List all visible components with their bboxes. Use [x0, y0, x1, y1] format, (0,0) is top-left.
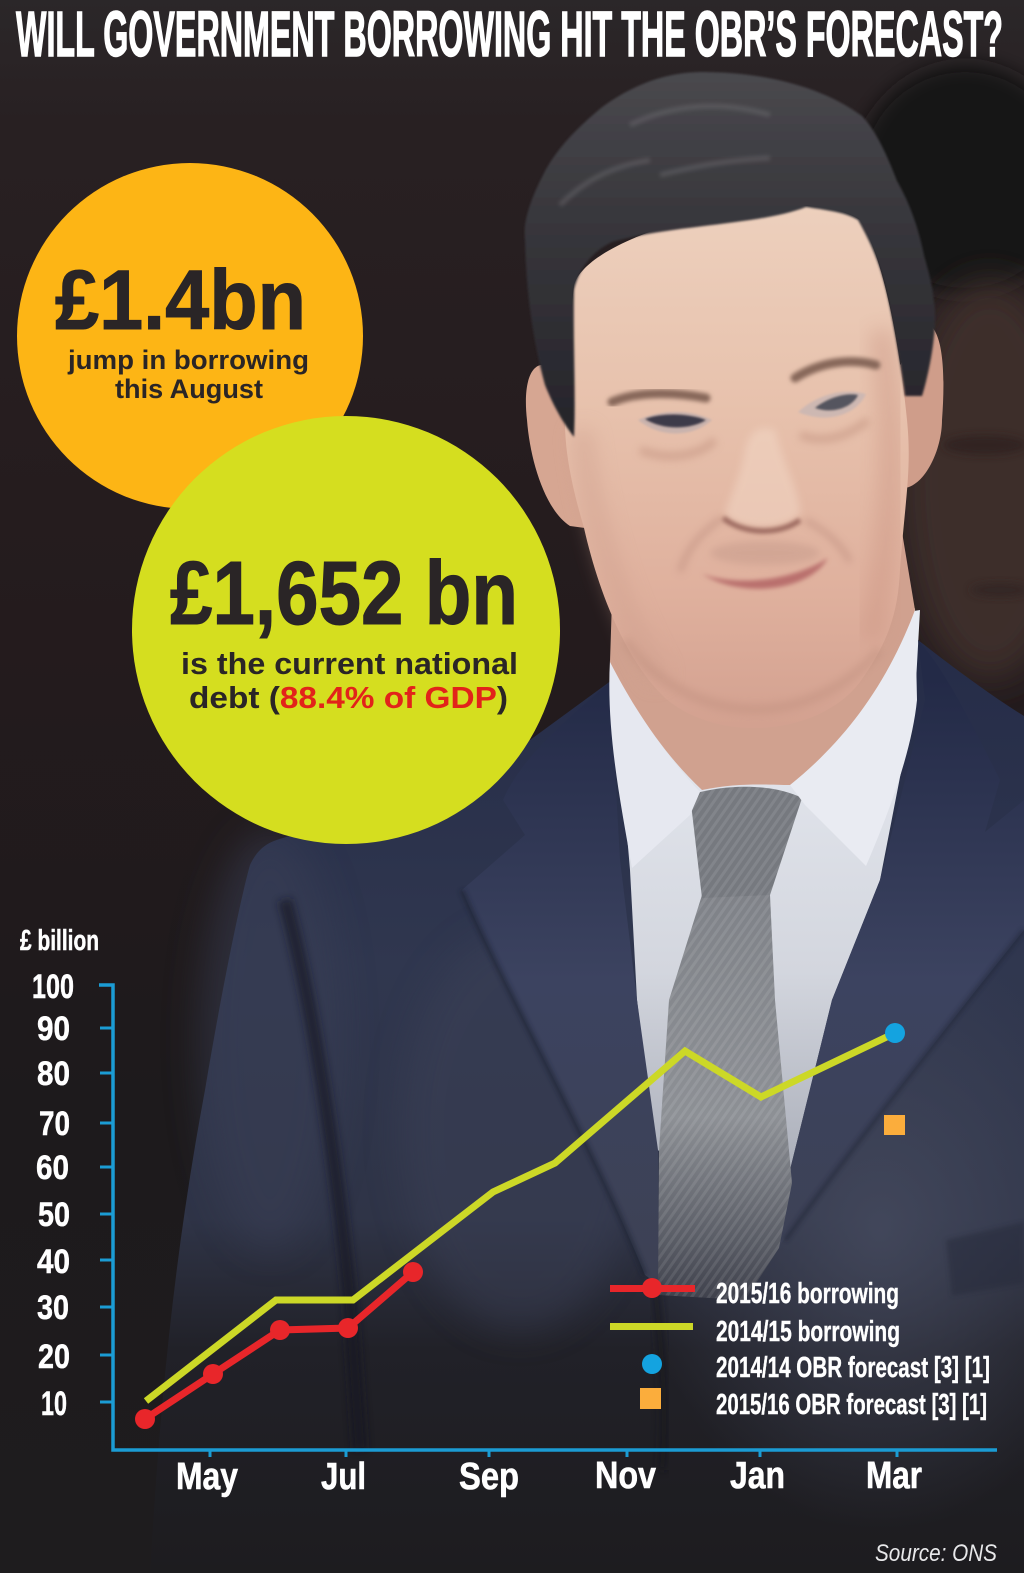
- right eye: [798, 391, 866, 418]
- callout: £1.4bn borrowing jump: £1.4bn: [55, 253, 306, 347]
- source note: Source: ONS: [875, 1540, 997, 1567]
- jaw shadow: [625, 640, 880, 709]
- y axis labels: 80: [37, 1055, 70, 1093]
- x axis labels: [176, 1455, 922, 1498]
- legend key: 2015/16 borrowing: [610, 1278, 899, 1310]
- y axis labels: 20: [38, 1338, 70, 1376]
- y axis labels: 90: [37, 1010, 70, 1048]
- right eyebrow: [795, 362, 876, 378]
- y axis labels: 60: [36, 1149, 69, 1187]
- shirt front: [612, 610, 920, 1170]
- x axis labels: Sep: [459, 1456, 519, 1498]
- tie knot: [690, 787, 802, 898]
- right lapel: [780, 640, 1024, 1245]
- y axis labels: [32, 968, 74, 1423]
- nose: [725, 428, 800, 527]
- y axis labels: 100: [32, 968, 74, 1006]
- lapel shadows: [462, 890, 645, 1275]
- right collar: [790, 608, 917, 866]
- right-side suit highlight: [640, 930, 1024, 1530]
- callout: £1,652 bn national debt: [132, 416, 560, 844]
- upper lip shading: [710, 541, 820, 565]
- y axis labels: 70: [39, 1105, 70, 1143]
- hair highlights: [560, 106, 770, 205]
- right ear: [880, 322, 943, 488]
- left eye: [638, 412, 712, 434]
- suit body: [150, 640, 1024, 1573]
- hair: [525, 72, 935, 437]
- callout: £1.4bn borrowing jump: [17, 163, 363, 509]
- y axis title: £ billion: [20, 925, 99, 957]
- body crease: [285, 900, 360, 1450]
- left-side suit highlight: [200, 830, 340, 1250]
- line: 2015/16 borrowing: [135, 1262, 423, 1429]
- callout: £1,652 bn national debt: debt (88.4% of GDP ): [189, 680, 508, 715]
- x axis labels: Jul: [321, 1456, 366, 1498]
- left lapel: [462, 682, 659, 1285]
- under-eye shadows: [640, 420, 868, 456]
- line: 2014/15 borrowing: [146, 1033, 895, 1401]
- lower suit seam: [655, 1285, 664, 1470]
- tie blade: [658, 895, 792, 1300]
- mouth: [702, 558, 828, 589]
- legend key: 2014/15 borrowing: [610, 1316, 900, 1348]
- left collar: [609, 660, 700, 868]
- face: [565, 206, 909, 728]
- left ear: [526, 365, 600, 530]
- legend key: 2015/16 borrowing: 2015/16 borrowing: [716, 1278, 899, 1310]
- photo: figure in the background: [855, 65, 1024, 680]
- legend key: 2015/16 OBR forecast: [640, 1388, 987, 1421]
- x axis labels: Nov: [595, 1455, 656, 1497]
- left eyebrow: [612, 394, 706, 402]
- marker: 2015/16 OBR forecast: [884, 1115, 905, 1135]
- callout: £1.4bn borrowing jump: jump in borrowing: [67, 345, 309, 375]
- centre-body highlight: [400, 930, 640, 1330]
- legend key: 2014/15 borrowing: 2014/15 borrowing: [716, 1316, 900, 1348]
- chart: borrowing line chart: [20, 925, 997, 1498]
- x axis labels: Mar: [866, 1455, 922, 1497]
- neck: [610, 520, 915, 790]
- y axis labels: 40: [37, 1243, 70, 1281]
- x axis labels: Jan: [730, 1455, 785, 1497]
- smile crease: [680, 518, 850, 572]
- right cheek shading: [870, 330, 890, 640]
- y axis labels: 10: [41, 1385, 67, 1423]
- left cheek shading: [582, 430, 660, 680]
- y axis labels: 50: [38, 1196, 70, 1234]
- callout: £1,652 bn national debt: £1,652 bn: [170, 544, 518, 644]
- y axis labels: 30: [37, 1289, 69, 1327]
- marker: 2014/15 OBR forecast: [885, 1023, 905, 1043]
- x axis labels: May: [176, 1456, 238, 1498]
- callout: £1.4bn borrowing jump: this August: [115, 374, 263, 404]
- axes: [99, 985, 997, 1457]
- callout: £1,652 bn national debt: is the current national: [181, 646, 518, 681]
- legend: [610, 1278, 990, 1421]
- chest pocket: [946, 1222, 1024, 1296]
